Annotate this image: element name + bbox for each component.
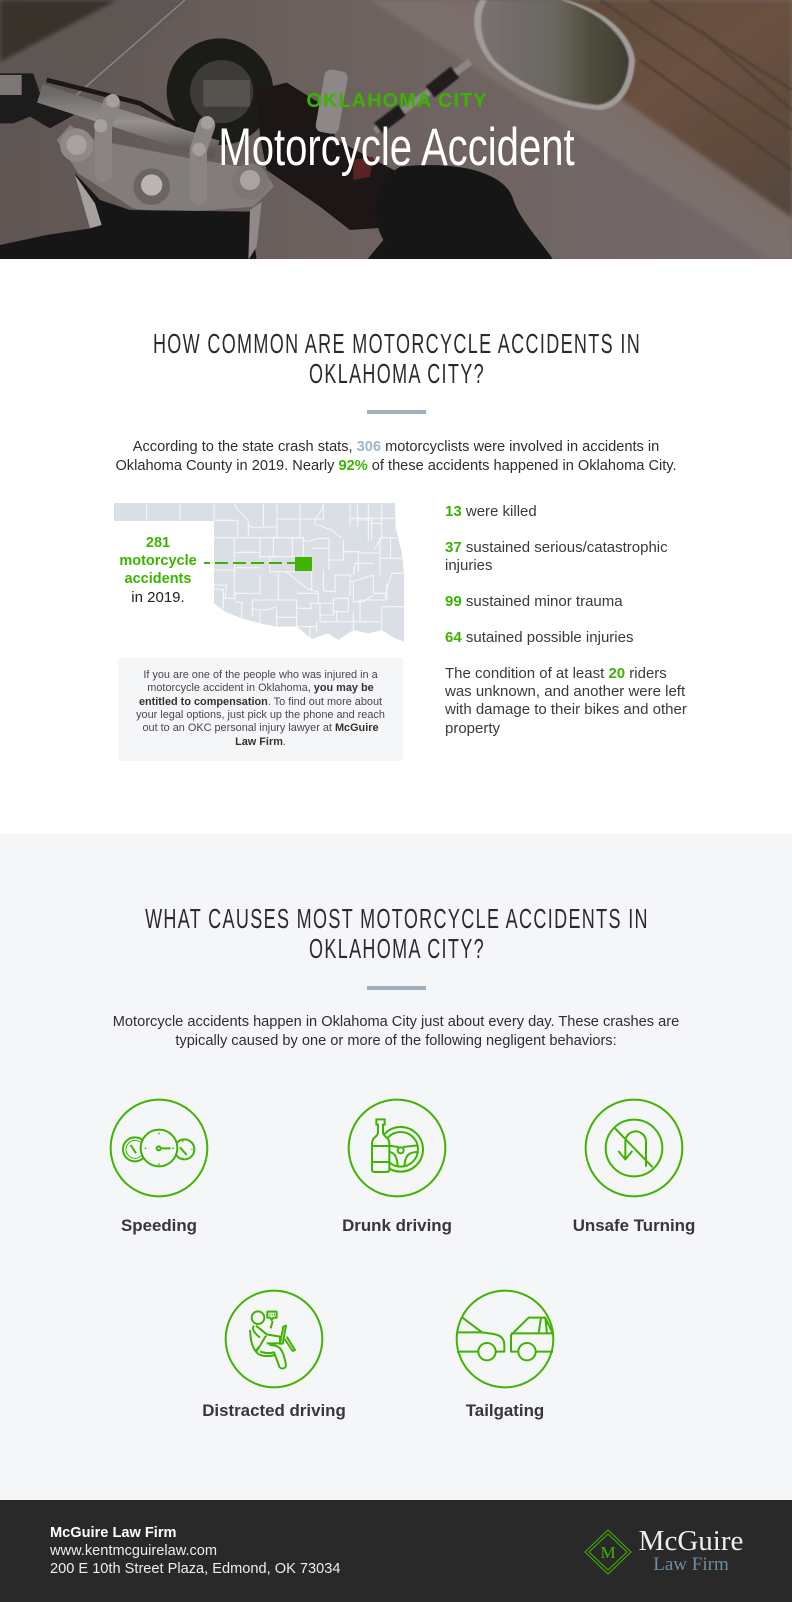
icon: bottle and steering wheel [348, 1098, 446, 1198]
footer: Law Firm [653, 1554, 729, 1575]
mirror [474, 0, 635, 110]
stat: 20 unknown condition: The condition of at least 20 riders [445, 665, 667, 682]
divider [367, 986, 426, 990]
firm contact details [50, 1525, 340, 1577]
label: speeding: Speeding [121, 1216, 197, 1235]
hero photo: motorcycle handlebars and road [0, 0, 792, 259]
intro paragraph: Oklahoma County in 2019. Nearly 92% of these accidents happened in Oklahoma City. [115, 458, 677, 474]
title: Motorcycle Accident: Motorcycle Accident [218, 118, 575, 177]
label: tailgating: Tailgating [466, 1401, 544, 1420]
icon: distracted driver [224, 1290, 324, 1388]
logo: diamond monogram [584, 1529, 632, 1575]
firm contact details: www.kentmcguirelaw.com [50, 1543, 217, 1559]
icon: no U-turn [584, 1098, 684, 1198]
hero banner [0, 0, 792, 259]
intro paragraph [115, 439, 677, 474]
heading: what causes: OKLAHOMA CITY? [309, 932, 485, 964]
stat: 64 possible injuries: 64 sutained possible injuries [445, 629, 633, 646]
stat: 20 unknown condition [445, 665, 687, 737]
callout: 281 motorcycle accidents in 2019: accidents [125, 571, 191, 587]
callout: 281 motorcycle accidents in 2019: motorcycle [119, 553, 197, 569]
heading: what causes: WHAT CAUSES MOST MOTORCYCLE ACCIDENTS IN [145, 903, 649, 934]
note text: entitled to compensation. To find out more about [139, 696, 382, 708]
stat: 37 serious injuries: 37 sustained serious/catastrophic [445, 539, 668, 556]
causes intro [113, 1014, 679, 1048]
icon: speeding gauges [110, 1098, 208, 1198]
stat: 20 unknown condition: was unknown, and another were left [445, 683, 685, 700]
firm contact details: McGuire Law Firm [50, 1525, 177, 1541]
callout: 281 motorcycle accidents in 2019: in 2019. [131, 589, 185, 606]
panel: compensation note [118, 658, 403, 761]
icon: two cars tailgating [456, 1290, 554, 1388]
left grip and clutch [0, 73, 77, 128]
intro paragraph: According to the state crash stats, 306 motorcyclists were involved in accidents in [133, 439, 659, 455]
callout: 281 motorcycle accidents in 2019: 281 [146, 535, 170, 551]
label: unsafe turning: Unsafe Turning [573, 1216, 695, 1235]
glove [376, 165, 553, 260]
dashed leader to Oklahoma County [204, 562, 295, 564]
logo: firm wordmark: McGuire [639, 1525, 743, 1557]
label: distracted driving: Distracted driving [202, 1401, 346, 1420]
fork clamp [57, 125, 274, 213]
lower fork and tank [0, 173, 257, 260]
heading: how common [153, 328, 641, 388]
note text: your legal options, just pick up the phone and reach [136, 709, 385, 721]
heading: what causes [145, 903, 649, 964]
causes intro: Motorcycle accidents happen in Oklahoma City just about every day. These crashes are [113, 1014, 679, 1030]
heading: how common: HOW COMMON ARE MOTORCYCLE ACCIDENTS IN [153, 328, 641, 359]
note text: If you are one of the people who was injured in a [143, 669, 378, 681]
firm contact details: 200 E 10th Street Plaza, Edmond, OK 73034 [50, 1561, 340, 1577]
stat: 37 serious injuries [445, 539, 668, 574]
note text: Law Firm. [235, 736, 286, 748]
stat: 13 killed: 13 were killed [445, 503, 537, 520]
stat: 99 minor trauma: 99 sustained minor trauma [445, 593, 623, 610]
logo: firm wordmark [639, 1525, 743, 1575]
label: drunk driving: Drunk driving [342, 1216, 452, 1235]
stat: 20 unknown condition: property [445, 720, 500, 737]
instrument cluster [167, 38, 273, 145]
callout: 281 motorcycle accidents in 2019 [119, 535, 197, 606]
bar risers [103, 103, 112, 173]
county marker [295, 557, 312, 571]
note text: out to an OKC personal injury lawyer at McGuire [142, 722, 379, 734]
map of Oklahoma counties [114, 503, 404, 642]
divider [367, 410, 426, 414]
note text: motorcycle accident in Oklahoma, you may be [147, 682, 374, 694]
panel: causes [0, 834, 792, 1500]
causes intro: typically caused by one or more of the following negligent behaviors: [175, 1032, 617, 1048]
heading: how common: OKLAHOMA CITY? [309, 358, 485, 388]
footer [0, 1500, 792, 1602]
stat: 37 serious injuries: injuries [445, 557, 493, 574]
subtitle: Oklahoma City: OKLAHOMA CITY [306, 90, 488, 112]
logo: diamond monogram: M [600, 1543, 616, 1562]
stat: 20 unknown condition: with damage to their bikes and other [445, 701, 687, 718]
note text [136, 669, 385, 748]
control housing [257, 83, 400, 230]
